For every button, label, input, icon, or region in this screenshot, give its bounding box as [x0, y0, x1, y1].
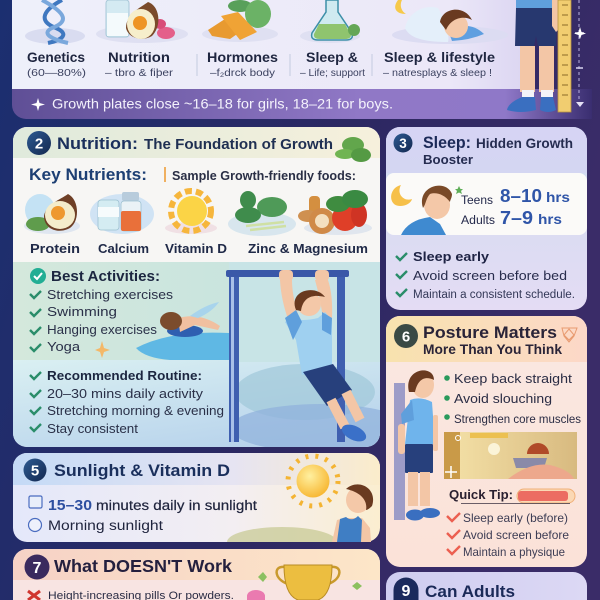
heading: sunlight: 5: [31, 462, 39, 480]
label: hormones: Hormones: [207, 50, 278, 65]
stats: sleep hours: 8–10: [500, 185, 542, 206]
icon: clock: [28, 518, 42, 532]
list: best activities: Swimming: [47, 305, 117, 319]
icon: sun: [288, 456, 338, 506]
heading: sleep: Hidden Growth: [476, 136, 573, 151]
list: posture tips: [444, 371, 581, 426]
labels: nutrients: Protein: [30, 241, 80, 256]
stats: sleep hours: 7–9: [500, 207, 533, 228]
heading: sleep: 3: [399, 136, 407, 151]
heading: posture: [394, 323, 562, 357]
label: nutrition: Nutrition: [108, 50, 170, 65]
panel: can adults: [386, 572, 587, 600]
heading: sunlight: Sunlight & Vitamin D: [54, 461, 230, 480]
stats: sleep hours: Adults: [461, 215, 495, 227]
illustration: boy on pull-up bar: [226, 270, 369, 445]
list: best activities: Hanging exercises: [47, 323, 157, 337]
heading: posture: More Than You Think: [423, 342, 562, 357]
callout: quick tip: [449, 488, 575, 504]
stats: sleep hours: hrs: [546, 189, 570, 205]
icon: moon: [391, 185, 412, 206]
labels: nutrients: [30, 241, 368, 256]
icon: spinach: [228, 191, 296, 236]
list: quick tips: Avoid screen before: [463, 528, 569, 542]
panel: sleep: [386, 127, 587, 310]
text: duration: [48, 497, 257, 514]
heading: what doesn't work: What DOESN'T Work: [54, 556, 232, 576]
text: duration: 15–30: [48, 497, 92, 514]
panel: what doesn't work: [13, 549, 380, 600]
list: sleep tips: Sleep early: [413, 249, 490, 264]
marker: orange bar: [164, 167, 166, 182]
list: quick tips: [447, 511, 569, 559]
labels: nutrients: Calcium: [98, 241, 149, 256]
icon: sleeping boy: [392, 0, 508, 44]
illustration: posture picture: [444, 432, 577, 479]
icon: trophy: [247, 565, 362, 600]
list: recommended routine: 20–30 mins daily activity: [47, 387, 204, 401]
label: sleep and lifestyle: Sleep & lifestyle: [384, 50, 496, 65]
icon: milk and avocado: [96, 0, 188, 43]
illustration: boy looking up: [332, 484, 373, 542]
list: quick tips: Sleep early (before): [463, 511, 568, 525]
stats: sleep hours: [461, 185, 570, 228]
list: recommended routine: [30, 369, 224, 436]
icon: vitamin D sun: [165, 191, 217, 234]
labels: nutrients: Vitamin D: [165, 241, 227, 256]
illustration: standing boy and ruler: [507, 0, 586, 112]
list: best activities: [30, 268, 173, 354]
panel: posture: [386, 316, 587, 567]
callout: growth plates: Growth plates close ~16–18 for girls, 18–21 for boys.: [52, 96, 393, 112]
subheading: sample foods: Sample Growth-friendly foods:: [172, 169, 356, 183]
heading: sleep: [394, 133, 573, 167]
illustration: standing boy: [394, 370, 440, 520]
stats: sleep hours: hrs: [538, 211, 562, 227]
list: sleep tips: Maintain a consistent schedule.: [413, 289, 575, 301]
list: posture tips: Strengthen core muscles: [454, 412, 581, 426]
illustration: swimmer: [136, 302, 229, 360]
panel: growth factors: [12, 0, 592, 120]
heading: sleep: Sleep:: [423, 133, 471, 152]
labels: nutrients: Zinc & Magnesium: [248, 241, 368, 256]
heading: nutrition: The Foundation of Growth: [144, 137, 333, 153]
heading: posture: Posture Matters: [423, 323, 557, 342]
label: sleep: [300, 50, 365, 79]
icon: hormones food: [202, 0, 278, 42]
heading: nutrition: Nutrition:: [57, 134, 138, 153]
label: hormones: [207, 50, 278, 79]
icon: mushrooms and tomatoes: [298, 190, 372, 235]
list: best activities: Stretching exercises: [47, 288, 173, 302]
heading: can adults: 9: [402, 583, 411, 600]
label: sleep and lifestyle: – natresplays & sleep !: [383, 67, 492, 79]
icon: cross: [28, 591, 40, 600]
list: posture tips: Avoid slouching: [454, 391, 552, 406]
text: duration: minutes daily in sunlight: [96, 498, 257, 513]
label: sleep: Sleep &: [306, 50, 358, 65]
icon: leaves: [335, 137, 371, 162]
label: sleep: – Life; support: [300, 67, 365, 79]
icon: calendar: [29, 496, 42, 508]
heading: what doesn't work: 7: [33, 560, 42, 577]
list: recommended routine: Stretching morning & evening: [47, 404, 224, 418]
illustration: boy head: [401, 186, 463, 235]
list: sleep tips: [396, 249, 575, 301]
list: best activities: Yoga: [47, 340, 80, 354]
list: sleep tips: Avoid screen before bed: [413, 269, 567, 283]
label: sleep and lifestyle: [383, 50, 496, 79]
heading: sunlight: [24, 458, 230, 482]
heading: nutrition: 2: [35, 136, 43, 152]
label: genetics: [27, 50, 86, 79]
callout: quick tip: Quick Tip:: [449, 488, 513, 502]
label: genetics: Genetics: [27, 50, 85, 65]
icon: protein avocado: [24, 194, 80, 234]
heading: sleep: Booster: [423, 152, 473, 167]
icon: flask: [300, 0, 360, 43]
icon: calcium bottles: [90, 192, 154, 234]
list: posture tips: Keep back straight: [454, 371, 572, 386]
label: hormones: –f₂drck body: [210, 67, 276, 79]
text: morning sunlight: Morning sunlight: [48, 518, 163, 533]
heading: key nutrients: Key Nutrients:: [29, 166, 147, 184]
icon: badge outline: [562, 328, 577, 342]
heading: what doesn't work: [24, 554, 232, 580]
panel: nutrition: [13, 127, 410, 452]
icon: DNA: [25, 0, 85, 44]
label: genetics: (60—80%): [27, 67, 86, 79]
label: nutrition: – tbro & fiþer: [105, 67, 174, 79]
list: quick tips: Maintain a physique: [463, 545, 565, 559]
stats: sleep hours: Teens: [461, 195, 493, 207]
list: best activities: Best Activities:: [51, 269, 160, 285]
icon: sparkle: [95, 341, 110, 358]
list: recommended routine: Recommended Routine:: [47, 369, 202, 383]
panel: sunlight and vitamin D: [13, 453, 380, 542]
heading: posture: 6: [402, 328, 410, 346]
list: recommended routine: Stay consistent: [47, 422, 139, 436]
heading: nutrition: [27, 131, 333, 155]
heading: can adults: [394, 578, 515, 600]
label: nutrition: [105, 50, 174, 79]
